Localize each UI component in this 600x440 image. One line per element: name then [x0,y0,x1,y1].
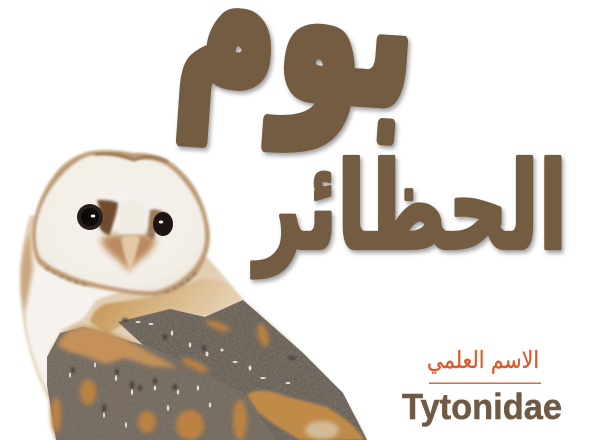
cream mantle [90,278,243,334]
illustration: barn owl [21,150,367,440]
label: scientific name heading: الاسم العلمي [427,346,539,374]
white chest feathers [25,235,125,392]
upper wing, grey [118,300,367,440]
label: scientific name: Tytonidae [402,386,562,427]
brown patch right eye [147,209,168,240]
buff neck shading [21,232,33,312]
right eye [153,212,173,236]
left eye [77,204,103,230]
top rim accent [95,153,168,162]
divider line [429,382,541,384]
lower wing, grey [47,327,285,440]
orange shoulder patch [58,326,178,368]
lower rim dark flecks [45,268,198,292]
orange wing patches [51,318,271,440]
lower right flight feather [247,391,364,440]
pale feather tip [305,421,339,439]
nasal ridge [118,200,146,234]
facial disc [36,155,205,291]
title: barn owl in Arabic [170,0,567,277]
brown patch around beak [100,234,156,270]
owl body [21,215,367,440]
wing spots [69,321,290,428]
brown patch between eyes [97,200,118,236]
beak [121,235,140,274]
wing dark marks [71,318,296,412]
facial disc rim [32,150,210,296]
